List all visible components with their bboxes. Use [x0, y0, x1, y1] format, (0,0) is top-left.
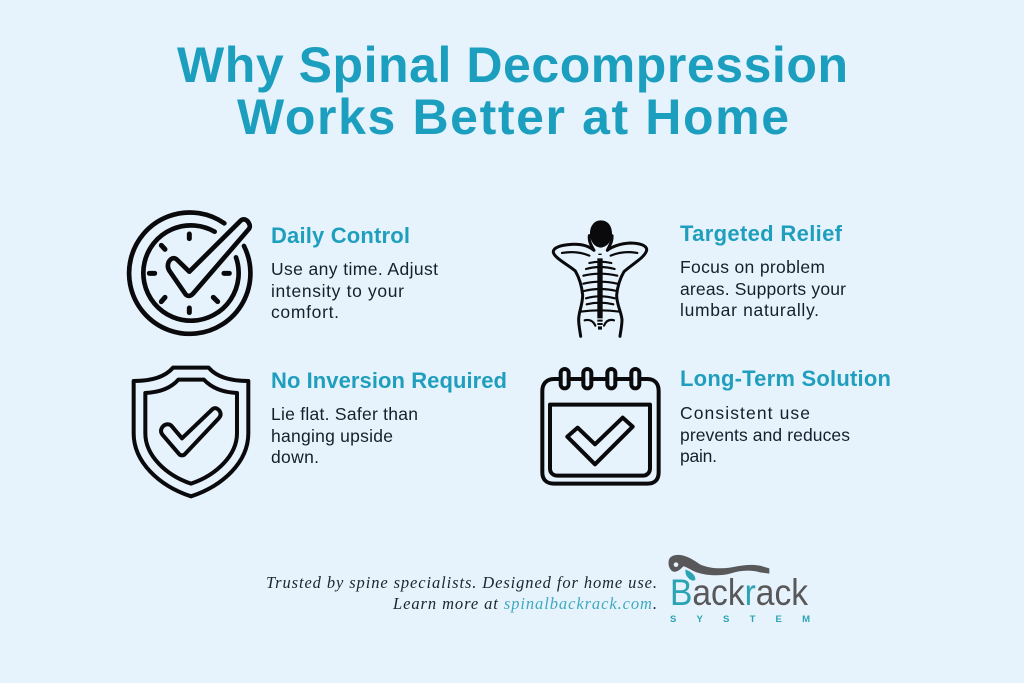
- text: targeted relief description: Focus on problem: [680, 257, 825, 277]
- text: daily control description: comfort.: [271, 302, 339, 322]
- text: long-term solution description: prevents and reduces: [680, 425, 850, 445]
- footer text: Learn more at spinalbackrack.com.: [392, 594, 657, 613]
- panel: daily control: [129, 213, 438, 334]
- text: daily control description: Use any time. Adjust: [271, 259, 438, 279]
- text: no inversion description: down.: [271, 447, 319, 467]
- heading: no inversion required: No Inversion Required: [271, 368, 507, 393]
- text: no inversion description: hanging upside: [271, 426, 393, 446]
- icon: clock with check mark: [129, 213, 250, 334]
- title: Works Better at Home: [237, 89, 789, 145]
- text: daily control description: intensity to your: [271, 281, 404, 301]
- text: targeted relief description: areas. Supports your: [680, 279, 846, 299]
- logo mark: rack shape: [669, 555, 769, 575]
- logo mark: leaf: [685, 570, 695, 581]
- logo subtitle: SYSTEM: [670, 614, 810, 625]
- text: targeted relief description: lumbar naturally.: [680, 300, 819, 320]
- text: long-term solution description: Consistent use: [680, 403, 810, 423]
- logo: Backrack System: [669, 555, 810, 625]
- text: no inversion description: [271, 404, 418, 467]
- title: [177, 37, 848, 145]
- heading: long-term solution: Long-Term Solution: [680, 366, 891, 391]
- text: long-term solution description: pain.: [680, 446, 717, 466]
- panel: targeted relief: [553, 220, 846, 336]
- footer text: [266, 573, 657, 613]
- footer text: Trusted by spine specialists. Designed for home use.: [266, 573, 657, 592]
- panel: no inversion required: [134, 368, 507, 496]
- heading: targeted relief: Targeted Relief: [680, 221, 843, 246]
- icon: calendar with check mark: [542, 369, 659, 484]
- text: targeted relief description: [680, 257, 846, 320]
- text: long-term solution description: [680, 403, 850, 466]
- logo wordmark: Backrack: [670, 572, 808, 613]
- text: no inversion description: Lie flat. Safer than: [271, 404, 418, 424]
- title: Why Spinal Decompression: [177, 37, 848, 93]
- heading: daily control: Daily Control: [271, 223, 410, 248]
- icon: shield with check mark: [134, 368, 248, 496]
- text: daily control description: [271, 259, 438, 322]
- panel: long-term solution: [542, 366, 891, 484]
- icon: back with spine: [553, 220, 647, 336]
